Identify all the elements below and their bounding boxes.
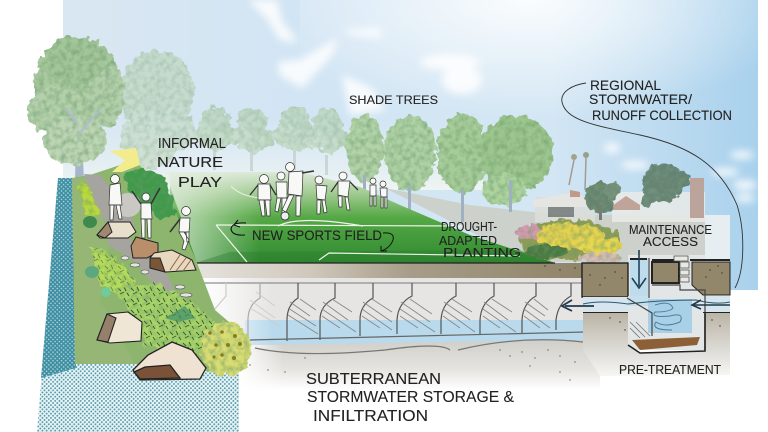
left fade lower — [239, 345, 284, 393]
label: informal nature play: PLAY — [178, 174, 222, 191]
icon: palm trees — [569, 152, 589, 190]
kid 7 — [380, 181, 387, 208]
sediment — [632, 337, 700, 350]
kids playing soccer — [250, 162, 387, 220]
arrow: new sports field left — [231, 220, 246, 235]
callout curve: regional stormwater — [562, 83, 743, 288]
kid 5 — [331, 172, 358, 210]
arch hatching — [250, 292, 550, 334]
rock: striped middle — [131, 237, 196, 272]
access shaft water — [630, 258, 648, 298]
soil blocks — [582, 263, 628, 297]
tank walls — [627, 258, 705, 350]
kid on rocks — [170, 206, 190, 250]
rock: lower left — [97, 312, 142, 343]
label: drought-adapted planting: PLANTING — [443, 245, 521, 260]
new sports field — [165, 172, 555, 263]
tree: large left — [27, 36, 125, 180]
stored water — [245, 320, 583, 345]
kid 2 — [275, 172, 287, 214]
label: informal nature play: NATURE — [157, 154, 223, 171]
swirl water — [654, 303, 681, 330]
arrow: new sports field right — [381, 233, 393, 251]
planting bed — [72, 148, 250, 372]
maintenance vault — [544, 215, 730, 376]
clouds — [248, 0, 757, 202]
label: regional stormwater runoff collection: RUNOFF COLLECTION — [592, 107, 732, 123]
kid 1 — [250, 174, 276, 216]
arrow: outflow to storage — [562, 300, 594, 311]
pale sky panel — [705, 215, 730, 262]
label: shade trees: SHADE TREES — [349, 93, 438, 107]
label: regional stormwater runoff collection: REGIONAL — [590, 77, 661, 93]
label: drought-adapted planting — [439, 219, 521, 260]
left fade upper — [203, 278, 273, 348]
rock: upper — [97, 222, 136, 238]
pale boulder behind kids — [115, 193, 141, 217]
concrete interior — [628, 255, 705, 350]
arrow: inflow to tank — [692, 300, 730, 309]
subterranean storage structure — [195, 263, 600, 393]
label: subterranean stormwater storage and infiltration: SUBTERRANEAN — [306, 371, 441, 388]
label: subterranean stormwater storage and infiltration: INFILTRATION — [313, 408, 428, 425]
kid 6 — [370, 178, 376, 206]
kid 3 — [282, 162, 314, 216]
drought-adapted planting flowers — [517, 220, 622, 263]
label: drought-adapted planting: DROUGHT- — [441, 219, 497, 234]
background haze — [63, 120, 483, 190]
label: subterranean stormwater storage and infiltration: STORMWATER STORAGE & — [307, 389, 514, 406]
tree row: shade trees — [194, 106, 553, 222]
label: drought-adapted planting: ADAPTED — [439, 233, 497, 248]
arrow: maintenance access down — [632, 250, 646, 288]
lower soil left — [583, 312, 730, 376]
label: subterranean stormwater storage and infiltration — [306, 371, 514, 425]
label: informal nature play — [157, 135, 226, 191]
soccer ball — [281, 212, 289, 220]
icon: dark tree by house — [585, 163, 691, 213]
stones in creek — [121, 256, 192, 297]
house group — [533, 152, 705, 222]
sky background — [63, 0, 758, 290]
ladder — [674, 256, 689, 282]
tree: second left — [120, 50, 195, 170]
road and distant slope — [385, 188, 705, 262]
label: maintenance access: MAINTENANCE — [629, 223, 712, 237]
rocky creek — [84, 174, 205, 318]
label: regional stormwater runoff collection — [589, 77, 732, 123]
teal halftone ground — [37, 178, 239, 432]
tank water — [648, 299, 692, 333]
hatching near sump — [630, 322, 650, 338]
label: regional stormwater runoff collection: STORMWATER/ — [589, 91, 692, 107]
soil speckles — [544, 265, 723, 331]
field markings — [216, 186, 520, 262]
green shrubs — [122, 166, 175, 218]
kids in nature play — [109, 174, 190, 250]
label: pre-treatment: PRE-TREATMENT — [619, 363, 721, 377]
rock: large bottom — [133, 342, 206, 380]
gravel speckles — [249, 349, 576, 381]
label: new sports field: NEW SPORTS FIELD — [252, 227, 382, 243]
arches — [203, 283, 585, 354]
kid arms raised — [132, 188, 160, 238]
kid 4 — [315, 176, 327, 214]
label: maintenance access — [629, 223, 712, 249]
kid climbing — [109, 174, 122, 220]
water pipe — [583, 297, 628, 312]
yellow-green shrub — [201, 322, 251, 376]
yellow highlight — [110, 148, 140, 172]
label: informal nature play: INFORMAL — [158, 135, 226, 152]
label: maintenance access: ACCESS — [643, 235, 698, 249]
